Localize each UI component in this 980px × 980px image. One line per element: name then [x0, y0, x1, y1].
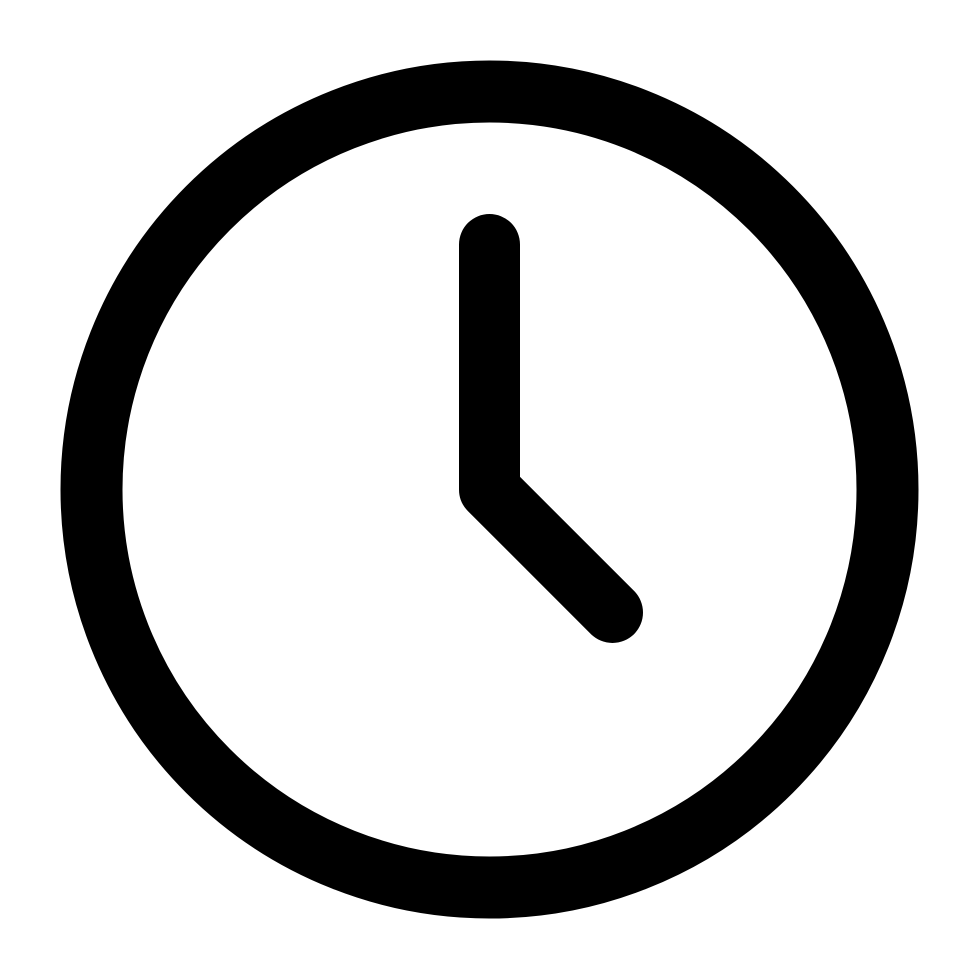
- clock face ring: [92, 92, 888, 888]
- clock hands: [490, 244, 612, 612]
